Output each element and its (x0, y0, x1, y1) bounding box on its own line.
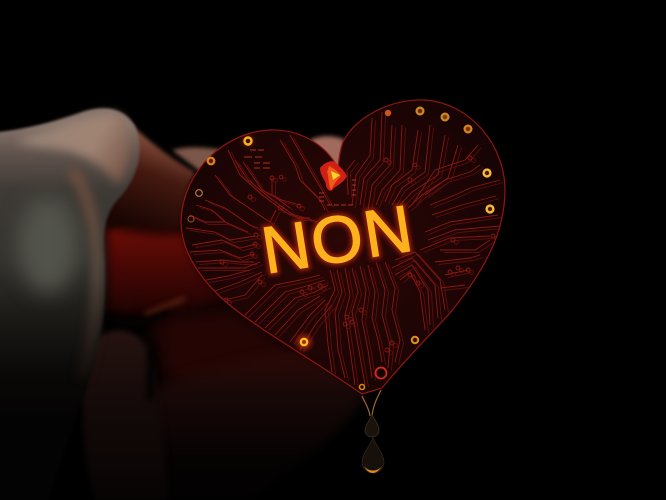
denser parallel traces (190, 114, 504, 388)
orange streak (145, 298, 185, 315)
heart board (181, 100, 505, 394)
drip thread (362, 390, 381, 416)
pad: right two (487, 206, 493, 212)
circuit traces (186, 112, 504, 388)
pad: top three (465, 126, 471, 132)
pad: right one (484, 170, 490, 176)
heart (181, 100, 505, 394)
traces left fan (186, 228, 262, 302)
pink edge light (72, 170, 97, 378)
drop glint (364, 466, 382, 473)
pad: upper left (242, 135, 254, 147)
red glow palm (106, 226, 226, 314)
pad: bottom left (296, 334, 312, 350)
dark shadow fold (144, 308, 170, 400)
bottom right finger (158, 352, 366, 449)
pad: faint left lower (188, 216, 194, 222)
glowing pads (188, 108, 493, 389)
far fingertips behind heart (172, 136, 345, 175)
traces bottom center (325, 262, 400, 385)
traces top right (347, 112, 472, 210)
traces right (412, 145, 500, 250)
knuckle highlight (15, 114, 130, 185)
main finger (0, 106, 140, 390)
small drop (365, 415, 379, 437)
pad: top two (442, 114, 448, 120)
large drop (362, 438, 384, 473)
chip pad marks (244, 150, 356, 205)
dim red under heart (146, 302, 300, 382)
traces upper left (190, 135, 330, 232)
dark red upper palm (114, 190, 186, 233)
grey finger sheen (18, 197, 78, 293)
pad: left (208, 158, 214, 164)
pad: faint left upper (196, 190, 202, 196)
NON label: NON (257, 191, 419, 287)
traces bottom right (392, 240, 490, 330)
notch burn (320, 161, 347, 191)
scene: hand holding circuit heart (0, 99, 506, 494)
hand (0, 108, 368, 500)
traces bottom left (245, 275, 332, 350)
NON glow: NON (257, 191, 419, 287)
pad: tip (360, 384, 364, 390)
thumb side (106, 122, 195, 228)
liquid drip (362, 390, 384, 473)
pad: top orange (385, 110, 391, 116)
pad: red ring (376, 368, 386, 378)
bottom middle finger (82, 330, 168, 500)
pad: bottom right (412, 337, 418, 343)
pad: top one (417, 108, 423, 114)
